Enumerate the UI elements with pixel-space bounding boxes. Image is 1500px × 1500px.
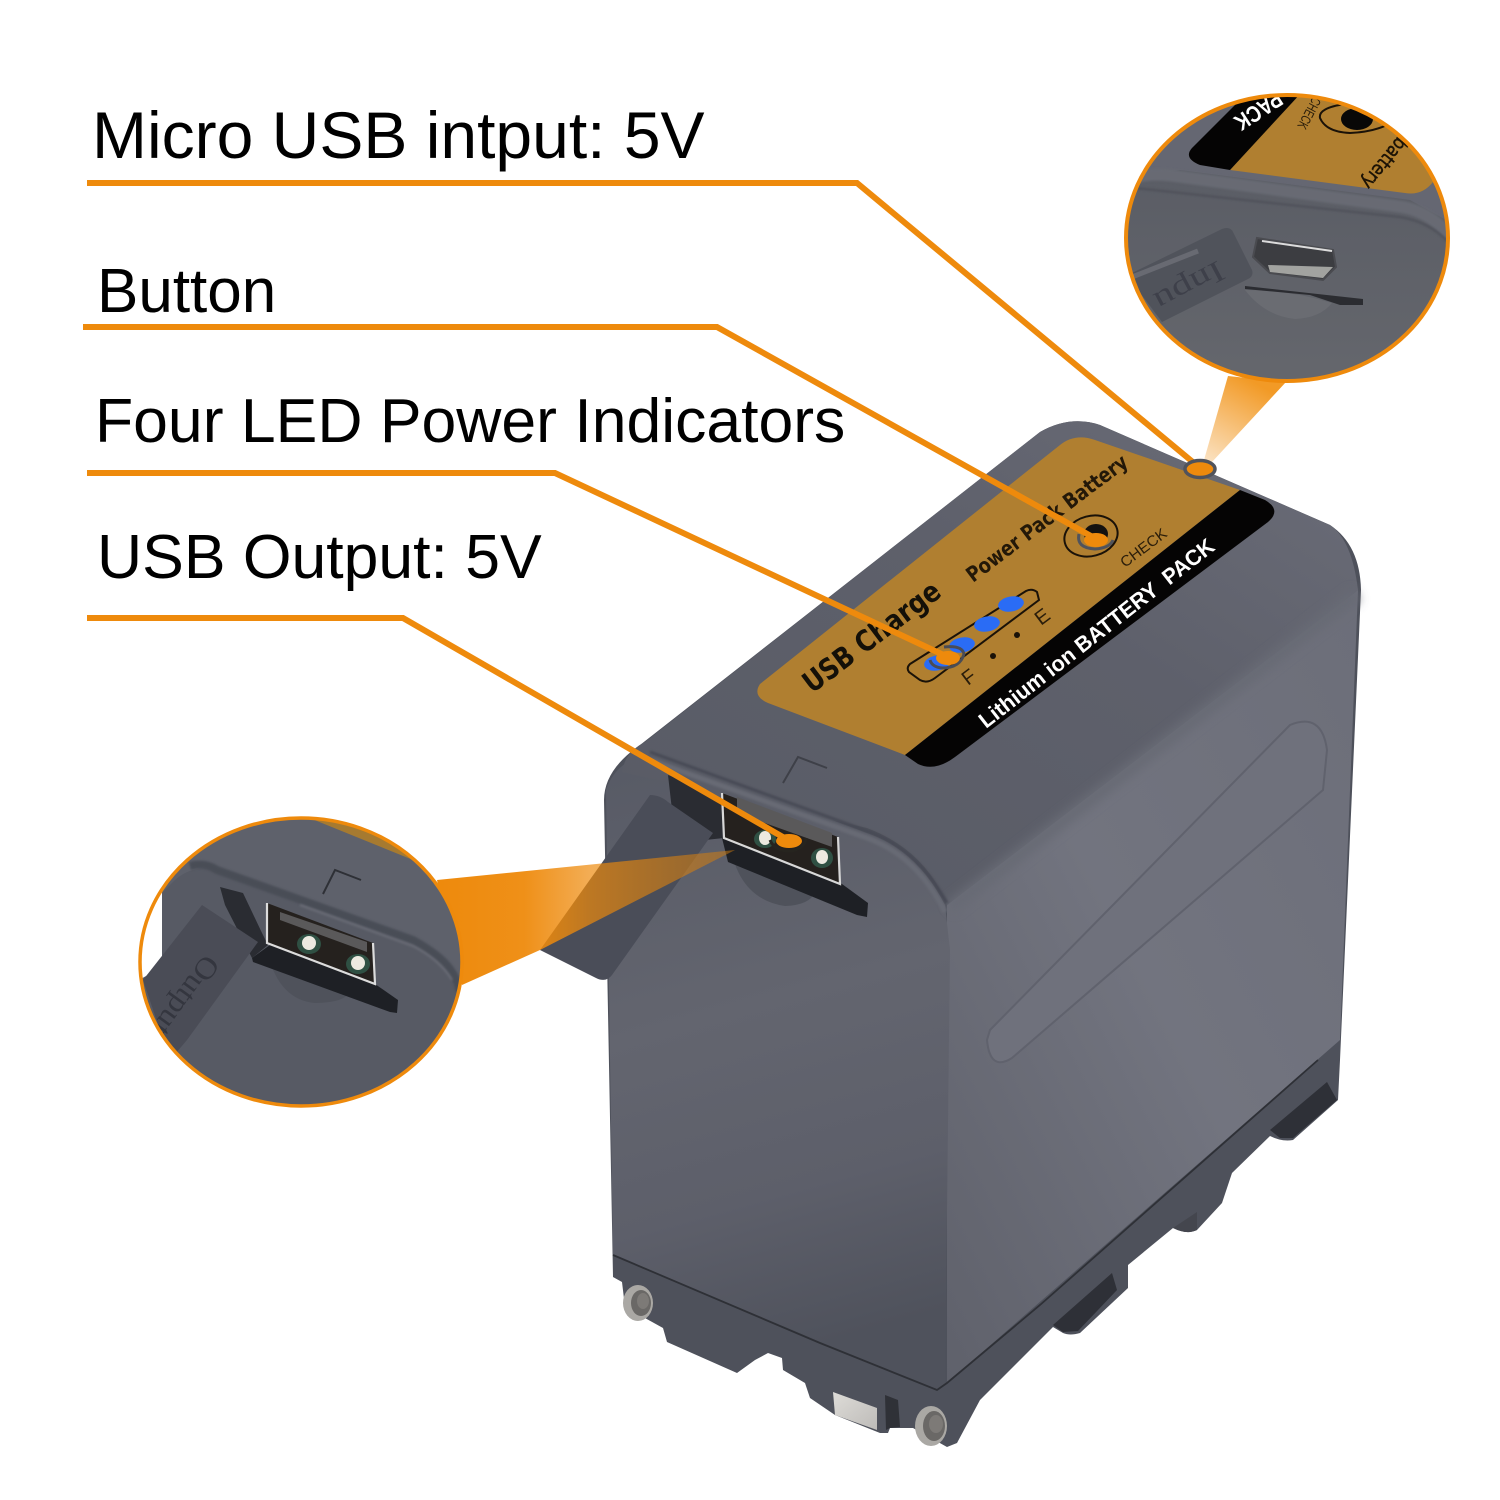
tan label panel [757, 437, 1240, 755]
screw right [915, 1406, 947, 1446]
magnifier content [1128, 97, 1446, 379]
USB magnifier [130, 800, 735, 1115]
dust flap [143, 905, 258, 1060]
recess [274, 970, 346, 1003]
tan sliver [315, 820, 411, 860]
hinge shadow [220, 887, 268, 958]
heading: Micro USB input: Micro USB intput: 5V [92, 98, 705, 172]
flap text Inpu: Inpu [1148, 254, 1230, 318]
white gutter [135, 810, 475, 1115]
slot [252, 945, 398, 1013]
label [757, 437, 1274, 767]
label text: Power Pack Battery: Power Pack Battery [962, 450, 1133, 587]
ridge shade [1135, 188, 1448, 242]
text PACK: PACK [1229, 86, 1287, 136]
small foot [1173, 1212, 1197, 1232]
leader line: micro USB [87, 183, 1215, 478]
edge highlight [650, 760, 945, 912]
metal contact [833, 1392, 877, 1430]
hinge shadow [668, 775, 724, 840]
side slots [1053, 1082, 1337, 1332]
flap stripe [1132, 251, 1198, 277]
magnifier ring [140, 818, 462, 1106]
leader line: LEDs [87, 473, 964, 668]
text battery: battery [1356, 133, 1411, 193]
port contacts [754, 830, 833, 868]
side recess panel [987, 722, 1327, 1062]
flap text Output: Output [145, 949, 226, 1043]
mark [323, 870, 361, 894]
port opening [722, 793, 840, 884]
heading: USB Output: USB Output: 5V [97, 522, 542, 592]
edge shade [650, 752, 947, 903]
heading: Four LED Power Indicators: Four LED Power Indicators [95, 386, 845, 456]
port top highlight [1262, 241, 1332, 251]
mark on top [783, 757, 827, 783]
half-round recess [733, 858, 815, 906]
ridge [190, 865, 460, 992]
label text: Lithium ion BATTERY PACK: Lithium ion BATTERY PACK [974, 533, 1219, 733]
port tongue [737, 797, 832, 847]
heading: Button: Button [97, 257, 276, 326]
beam to micro USB [1204, 376, 1286, 462]
front face [606, 752, 950, 1390]
micro USB port [1253, 238, 1336, 280]
port silver frame [722, 793, 840, 884]
label text: USB Charge: USB Charge [796, 574, 947, 700]
side face [947, 590, 1358, 1383]
USB output port [540, 775, 868, 980]
screw left [623, 1285, 653, 1321]
battery silhouette [604, 421, 1361, 1447]
LED scale marks: E [1031, 604, 1055, 630]
top shell [162, 892, 163, 893]
lens body [142, 868, 457, 1104]
label text: CHECK: CHECK [1117, 525, 1171, 571]
recess half disc [1245, 290, 1332, 319]
battery body [604, 421, 1361, 1447]
black label band [905, 490, 1274, 767]
button zoomed [1320, 104, 1387, 133]
LED frame [908, 590, 1039, 682]
port contacts [297, 934, 370, 974]
port opening [267, 903, 375, 984]
dust flap [540, 795, 713, 980]
micro USB magnifier [1120, 86, 1455, 462]
black band zoomed [1189, 92, 1302, 170]
contact slot [885, 1395, 900, 1430]
leader line: button [83, 327, 1113, 549]
LED indicators [923, 594, 1025, 673]
magnifier ring [1126, 95, 1448, 381]
ridge highlight [300, 905, 452, 980]
check button [1060, 510, 1122, 562]
leader line: USB output [87, 618, 806, 851]
port tongue [280, 912, 367, 952]
LED scale marks [958, 604, 1055, 690]
magnifier body [1128, 170, 1446, 379]
port silver frame [267, 903, 375, 984]
ridge [1130, 175, 1450, 236]
tan label zoomed [1230, 97, 1433, 194]
magnifier content [142, 820, 460, 1104]
port slot line [1245, 286, 1363, 305]
shoulder blend [950, 594, 1356, 908]
top shell [1149, 105, 1444, 219]
bottom seam lines [613, 1060, 1318, 1390]
text CHECK: CHECK [1294, 95, 1324, 133]
beam to USB port [437, 850, 735, 985]
top face [622, 421, 1358, 905]
port metal tongue [1268, 265, 1333, 278]
corner blend [944, 920, 950, 1150]
rubber flap [1132, 228, 1252, 322]
port shadow slot [722, 838, 868, 917]
LED scale marks: F [958, 665, 981, 690]
